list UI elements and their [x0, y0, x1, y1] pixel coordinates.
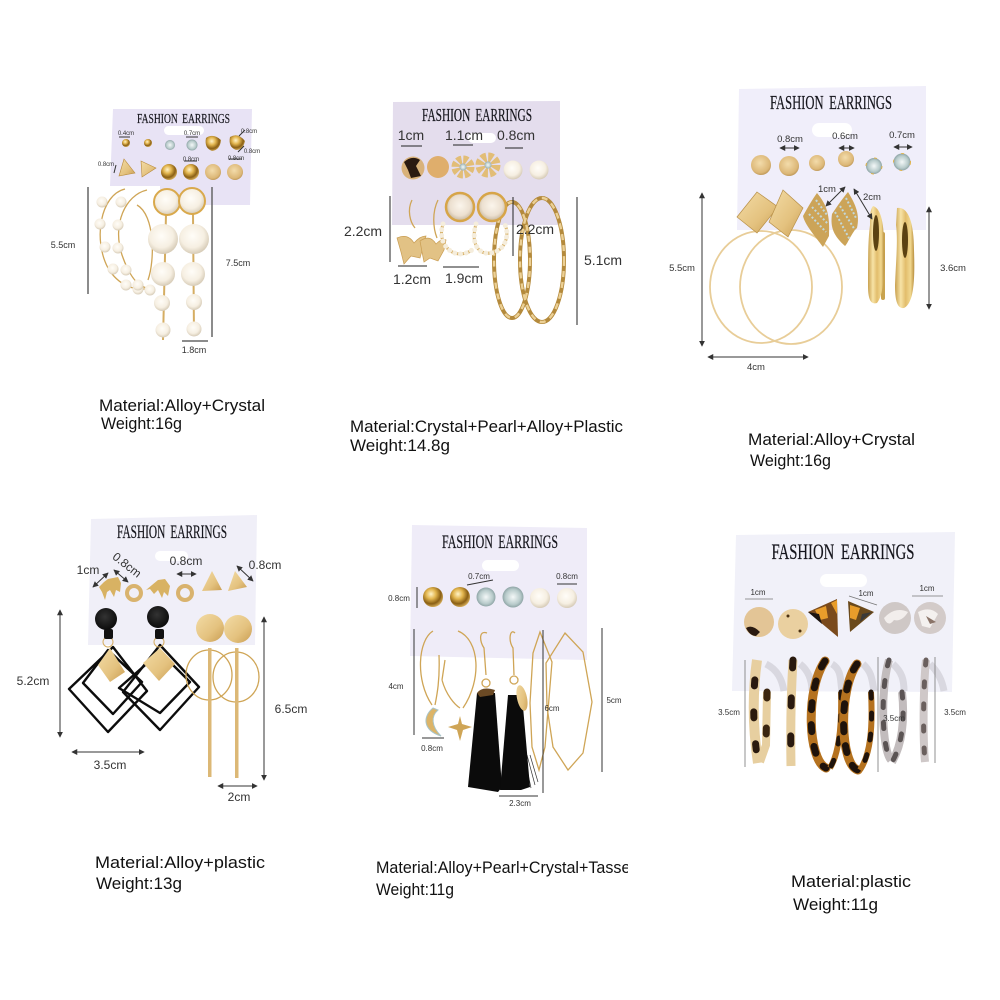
thick tube hoops	[868, 206, 914, 308]
dimension labels	[17, 549, 307, 804]
dimension labels: 0.8cm	[183, 157, 199, 163]
dimension labels: 2cm	[228, 790, 250, 804]
stud row two	[119, 159, 243, 180]
dimension labels: 1cm	[919, 584, 935, 593]
dimension labels: 1cm	[858, 589, 874, 598]
rhinestone wing studs	[803, 192, 858, 247]
dimension labels: 1cm	[77, 563, 99, 577]
dimension labels: 5.5cm	[51, 240, 75, 250]
weight text: Weight:16g	[101, 414, 182, 433]
card title: FASHION EARRINGS	[422, 105, 532, 125]
hanger hole	[820, 574, 867, 587]
angular hoops	[530, 632, 592, 770]
dimension labels: 1.8cm	[182, 345, 206, 355]
dimension labels: 0.8cm	[556, 572, 578, 581]
dimension labels	[669, 130, 966, 373]
dimension labels	[718, 584, 966, 723]
dimension labels: 3.6cm	[940, 263, 966, 274]
dimension labels: 2.3cm	[509, 799, 531, 808]
dimension labels: 0.8cm	[388, 594, 410, 603]
dimension labels: 1cm	[398, 127, 424, 143]
panel: black tassel set	[376, 525, 634, 899]
product card	[88, 515, 257, 645]
dimension labels: 0.8cm	[170, 554, 202, 568]
material text: Material:Alloy+Pearl+Crystal+Tassel	[376, 858, 634, 877]
material text: Material:plastic	[791, 872, 912, 891]
dimension labels: 3.5cm	[883, 714, 905, 723]
dimension lines	[414, 580, 602, 796]
product card	[737, 86, 926, 230]
dimension labels: 5.5cm	[669, 263, 695, 274]
dimension labels: 4cm	[388, 682, 404, 691]
hanger hole	[812, 123, 852, 137]
card title: FASHION EARRINGS	[442, 532, 558, 553]
studs	[744, 599, 946, 639]
panel: black geometric set	[17, 515, 307, 893]
dimension labels: 5cm	[606, 696, 622, 705]
long pearl drops	[148, 188, 209, 340]
studs	[99, 571, 247, 600]
moon and star hoops	[420, 631, 476, 741]
product card	[392, 101, 560, 225]
tan hoops	[754, 660, 793, 766]
panel: large gold hoop set	[669, 86, 966, 470]
square gold plates	[737, 190, 803, 237]
panel: butterfly and twisted hoop set	[344, 101, 623, 455]
dimension labels: 5.2cm	[17, 674, 49, 688]
dimension labels: 0.8cm	[497, 127, 535, 143]
dimension lines	[88, 130, 245, 341]
dimension labels: 3.5cm	[944, 708, 966, 717]
dimension labels: 1cm	[750, 588, 766, 597]
studs	[751, 151, 910, 176]
panel: pearl earring set	[51, 109, 265, 433]
dimension labels	[344, 127, 622, 287]
dimension labels: 7.5cm	[226, 258, 250, 268]
pearl crescent earrings	[442, 193, 507, 254]
dimension labels: 4cm	[747, 362, 765, 373]
dimension lines	[745, 596, 943, 772]
dimension labels: 0.8cm	[244, 149, 260, 155]
dimension labels	[51, 129, 260, 355]
studs	[402, 156, 548, 180]
dimension arrows	[60, 566, 264, 786]
square frame drops	[69, 606, 199, 732]
dimension labels: 1cm	[818, 184, 836, 195]
hanger hole	[164, 126, 204, 135]
amber tortoise hoops	[811, 661, 872, 770]
dimension labels: 5.1cm	[584, 252, 622, 268]
dimension labels: 1.9cm	[445, 270, 483, 286]
gold circle bar drops	[186, 614, 259, 778]
twisted hoops	[494, 198, 564, 322]
dimension labels: 0.7cm	[889, 130, 915, 141]
card title: FASHION EARRINGS	[772, 539, 914, 564]
card title: FASHION EARRINGS	[117, 523, 227, 543]
pearl hoops	[94, 189, 156, 296]
card title: FASHION EARRINGS	[137, 112, 230, 127]
panel: tortoise shell set	[718, 532, 966, 914]
dimension labels: 0.8cm	[249, 558, 281, 572]
hanger hole	[155, 551, 188, 561]
dimension labels: 3.5cm	[94, 758, 126, 772]
dimension labels: 1.1cm	[445, 127, 483, 143]
butterfly earrings	[397, 200, 446, 264]
hanger hole	[468, 133, 496, 143]
dimension labels: 0.8cm	[777, 134, 803, 145]
weight text: Weight:16g	[750, 451, 831, 470]
dimension labels: 0.8cm	[98, 162, 114, 168]
weight text: Weight:14.8g	[350, 436, 450, 455]
dimension labels: 0.8cm	[228, 156, 244, 162]
dimension labels: 0.8cm	[241, 129, 257, 135]
dimension labels: 3.5cm	[718, 708, 740, 717]
dimension labels: 2cm	[863, 192, 881, 203]
dimension labels: 6.5cm	[275, 702, 307, 716]
dimension labels: 2.2cm	[344, 223, 382, 239]
tassels	[468, 676, 538, 792]
dimension labels: 0.8cm	[421, 744, 443, 753]
dimension labels	[388, 572, 622, 808]
product card	[732, 532, 955, 692]
fish hooks	[481, 632, 515, 675]
card title: FASHION EARRINGS	[770, 92, 892, 114]
studs	[423, 586, 577, 608]
dimension labels: 0.8cm	[110, 549, 144, 581]
product card	[410, 525, 587, 660]
card shadows	[766, 664, 944, 691]
material text: Material:Alloy+Crystal	[748, 430, 915, 449]
dimension labels: 0.7cm	[468, 572, 490, 581]
hanger hole	[482, 560, 519, 571]
dimension labels: 6cm	[544, 704, 560, 713]
weight text: Weight:11g	[376, 880, 454, 899]
dimension labels: 0.7cm	[184, 131, 200, 137]
grey marble hoops	[883, 660, 926, 762]
dimension arrows	[702, 147, 929, 357]
dimension labels: 0.4cm	[118, 131, 134, 137]
material text: Material:Crystal+Pearl+Alloy+Plastic	[350, 417, 623, 436]
dimension labels: 0.6cm	[832, 131, 858, 142]
large hoops	[710, 230, 842, 344]
weight text: Weight:13g	[96, 874, 182, 893]
stud row one	[122, 135, 245, 151]
weight text: Weight:11g	[793, 895, 878, 914]
product card	[110, 109, 252, 205]
dimension labels: 1.2cm	[393, 271, 431, 287]
dimension labels: 2.2cm	[516, 221, 554, 237]
dimension lines	[390, 145, 577, 325]
material text: Material:Alloy+plastic	[95, 853, 266, 872]
material text: Material:Alloy+Crystal	[99, 396, 265, 415]
